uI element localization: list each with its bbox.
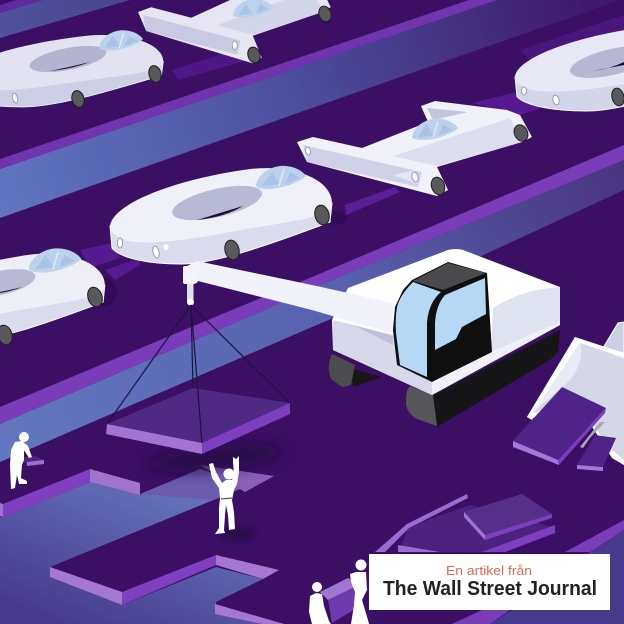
front track [406,330,560,427]
bulldozer blade [527,322,624,465]
workers carrying slab [309,560,369,624]
shadow under platform [146,439,284,477]
car: O right [515,25,624,111]
worker: arms raised [209,456,254,540]
car: T middle [297,101,532,197]
car: T top [138,0,333,64]
hook [183,266,196,306]
crane body [332,249,560,395]
cables [107,305,290,443]
wall segments [3,469,90,517]
crane [183,249,560,427]
label: article source [369,554,610,610]
cab [393,262,492,382]
road stripe: top [0,0,130,38]
worker: left, carrying slab [10,432,44,489]
lower road area with walls [0,465,284,624]
boom [183,261,394,334]
rear track [329,354,382,387]
car: O lower left [0,248,117,347]
road tracks [80,15,624,280]
dome [99,30,143,51]
slab: small on blade [577,435,616,471]
car: O top left [0,30,163,109]
dome [412,119,458,140]
road stripe: upper [0,0,620,218]
slab pile [375,494,555,552]
label line 1: En artikel från [446,563,532,578]
road stripe: middle [0,145,624,462]
wheels [223,239,241,261]
bottom right road stripe [452,520,624,624]
label line 2: The Wall Street Journal [383,578,597,600]
car: O main [110,166,347,264]
dome [256,166,306,189]
wheels [70,89,86,109]
lifted platform [106,388,290,454]
slab: large on blade [513,387,606,465]
